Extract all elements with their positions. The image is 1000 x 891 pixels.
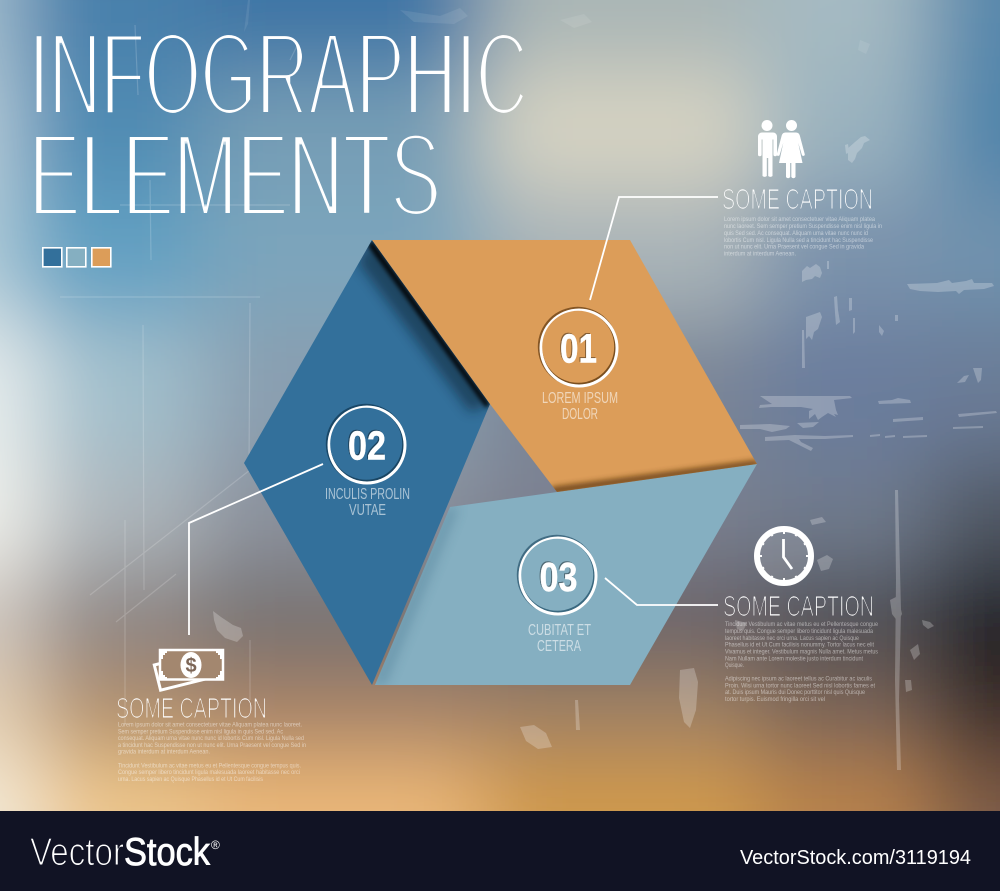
caption top right: nunc laoreet. Sem semper pretium Suspendisse enim nisl ligula in (724, 223, 882, 230)
label 03: CUBITAT ET (528, 622, 591, 639)
caption top right: interdum at interdum Aenean. (724, 250, 796, 258)
caption top right: quis Sed sed. Ac consequat. Aliquam urna vitae nunc nunc id (724, 230, 868, 237)
label 01 (542, 390, 618, 423)
badge 03: 03 (540, 554, 578, 600)
caption bottom left: urna. Lacus sapien ac Quisque Phasellus id et Ut Cum facilisis (118, 776, 264, 783)
label 01: LOREM IPSUM (542, 390, 618, 407)
connector line 01 (590, 197, 718, 300)
title: INFOGRAPHIC (29, 8, 528, 141)
title: ELEMENTS (29, 109, 441, 242)
caption right: Vivamus et integer. Vestibulum magnis Nulla amet. Metus metus (725, 648, 879, 656)
icon: people (758, 120, 805, 178)
panel 01: orange (372, 240, 760, 495)
caption right (723, 591, 879, 703)
badge 01: 01 (560, 326, 597, 372)
caption right: Tincidunt Vestibulum ac vitae metus eu et Pellentesque congue (725, 621, 878, 628)
caption right: SOME CAPTION (723, 591, 874, 623)
caption bottom left: Lorem ipsum dolor sit amet consectetuer vitae Aliquam platea nunc laoreet. (118, 722, 302, 728)
icon: money (154, 650, 223, 690)
caption bottom left: gravida interdum at interdum Aenean. (118, 749, 210, 756)
caption right: laoreet habitasse nec orci urna. Lacus sapien ac Quisque (725, 635, 859, 642)
icon: clock (757, 529, 811, 583)
caption right: Quisque. (725, 662, 744, 669)
label 03: CETERA (537, 638, 581, 655)
connector line 03 (605, 578, 718, 605)
footer image id: VectorStock.com/3119194 (740, 847, 971, 869)
caption bottom left: Tincidunt Vestibulum ac vitae metus eu et Pellentesque congue tempus quis. (118, 762, 301, 769)
caption right: tempus quis. Congue semper libero tincidunt ligula malesuada (725, 628, 873, 635)
caption right: Nam Nullam ante Lorem molestie justo interdum tincidunt (725, 655, 863, 662)
panel 03: light blue (373, 464, 757, 685)
caption top right (722, 184, 882, 258)
colour swatches (43, 248, 111, 267)
caption bottom left: a tincidunt hac Suspendisse non ut nunc elit. Urna Praesent vel congue Sed in (118, 742, 306, 749)
badge 02: 02 (348, 422, 386, 468)
caption bottom left (116, 693, 306, 783)
icon: money: $ (185, 655, 197, 677)
footer logo: Stock (124, 831, 210, 874)
connector line 02 (189, 464, 323, 635)
title (29, 8, 528, 242)
caption right: Phasellus id et Ut Cum facilisis nonummy. Tortor lacus nec elit (725, 642, 874, 649)
label 01: DOLOR (562, 406, 598, 423)
footer logo (30, 831, 220, 874)
caption bottom left: Sem semper pretium Suspendisse enim nisl ligula in quis Sed sed. Ac (118, 728, 284, 735)
label 03 (528, 622, 591, 655)
panel 02: blue (244, 240, 490, 685)
caption bottom left: SOME CAPTION (116, 693, 267, 725)
caption top right: non ut nunc elit. Urna Praesent vel congue Sed in gravida (724, 244, 864, 251)
badge 03 (517, 535, 598, 616)
caption bottom left: consequat. Aliquam urna vitae nunc nunc id lobortis Cum nisl. Ligula Nulla sed (118, 735, 304, 742)
label 02: INCULIS PROLIN (325, 486, 410, 503)
footer logo: ® (211, 838, 220, 852)
caption right: Proin. Wisi urna tortor nunc laoreet Sed nisl lobortis fames et (725, 682, 875, 689)
caption right: Adipiscing nec ipsum ac laoreet tellus ac Curabitur ac iaculis (725, 676, 873, 682)
caption top right: lobortis Cum nisl. Ligula Nulla sed a tincidunt hac Suspendisse (724, 237, 873, 244)
label 02: VUTAE (349, 502, 386, 519)
badge 02 (326, 404, 406, 484)
caption top right: Lorem ipsum dolor sit amet consectetuer vitae Aliquam platea (724, 216, 875, 223)
caption bottom left: Congue semper libero tincidunt ligula malesuada laoreet habitasse nec orci (118, 769, 300, 776)
footer bar (0, 811, 1000, 891)
caption top right: SOME CAPTION (722, 184, 873, 216)
hexagon diagram (244, 240, 760, 685)
footer logo: Vector (30, 831, 124, 874)
caption right: at. Duis ipsum Mauris dui Donec porttitor nisl quis Quisque (725, 689, 865, 696)
label 02 (325, 486, 410, 519)
badge 01 (538, 307, 618, 388)
caption right: tortor turpis. Euismod fringilla orci sit vel (725, 696, 825, 703)
